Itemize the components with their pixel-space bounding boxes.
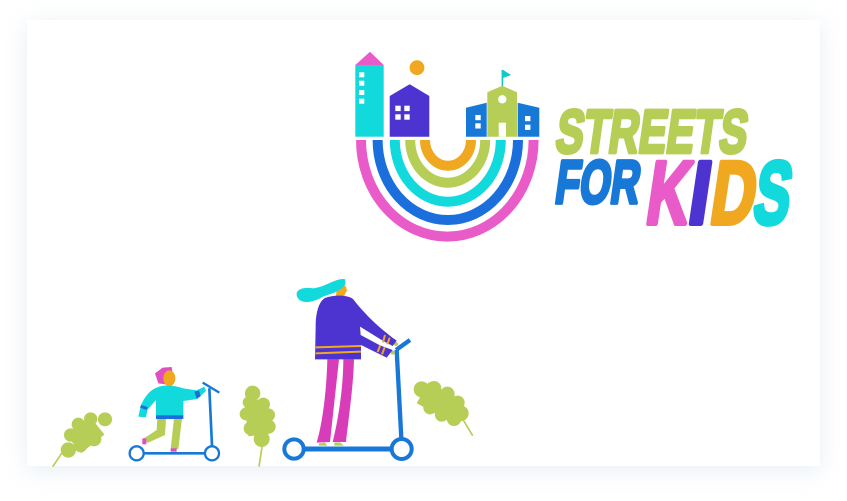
heading letters: KIDS: K xyxy=(641,143,698,242)
logo: city and rainbow xyxy=(355,52,539,237)
heading word: FOR: FOR xyxy=(552,148,645,216)
shoes xyxy=(142,438,177,452)
heading letters: KIDS: I xyxy=(683,143,718,242)
icon: sun xyxy=(410,60,424,75)
legs xyxy=(317,359,354,443)
heading letters: KIDS: D xyxy=(705,143,764,242)
illustration: child on scooter xyxy=(130,367,219,460)
rainbow arcs xyxy=(361,140,534,237)
scooter xyxy=(284,340,412,459)
illustration: oak leaf centre xyxy=(240,386,276,467)
icon: teal tower xyxy=(355,52,384,137)
sweater hem and cuffs xyxy=(140,390,201,419)
sweater stripes xyxy=(316,335,390,354)
illustration: oak leaf right xyxy=(414,381,473,436)
icon: school with flag xyxy=(466,70,539,137)
scooter xyxy=(130,383,219,460)
illustration: oak leaf far left xyxy=(53,412,112,467)
illustration: woman on scooter xyxy=(284,279,412,459)
face xyxy=(163,370,175,386)
shoes xyxy=(319,442,344,446)
face xyxy=(336,283,347,297)
icon: purple house xyxy=(390,84,429,137)
hands xyxy=(391,342,398,355)
hair xyxy=(155,367,173,384)
sweater xyxy=(138,385,206,417)
legs xyxy=(144,418,182,449)
heading word: STREETS: STREETS xyxy=(552,98,753,165)
heading letters: KIDS: S xyxy=(748,143,799,242)
wordmark: STREETS FOR KIDS xyxy=(552,98,799,242)
hair xyxy=(297,279,345,302)
heading letters: KIDS xyxy=(641,143,799,242)
sweater xyxy=(315,296,397,359)
